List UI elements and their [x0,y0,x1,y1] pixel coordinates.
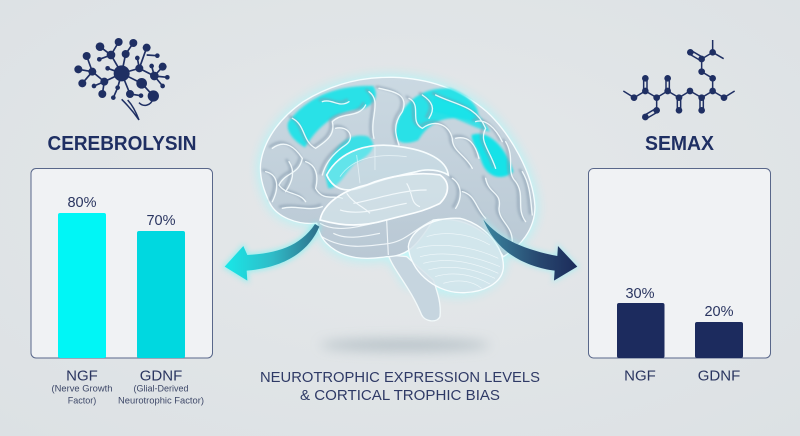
icon: peptide molecule [623,40,735,120]
axis label: Cerebrolysin GDNF [118,368,204,406]
bar: Cerebrolysin GDNF [137,231,185,358]
arrow: to Cerebrolysin [225,224,319,281]
arrow: to Semax [483,219,577,281]
axis label: Semax GDNF: GDNF [698,368,740,384]
temporal lobe [320,174,447,225]
axis label: Cerebrolysin NGF: (Nerve Growth [52,384,112,394]
panel: Cerebrolysin chart [31,168,212,358]
brain glow [260,77,535,293]
bar: Cerebrolysin NGF [58,213,106,358]
axis label: Semax NGF: NGF [624,368,656,384]
axis label: Cerebrolysin GDNF: Neurotrophic Factor) [118,396,204,406]
heading: Semax: SEMAX [645,133,715,155]
axis label: Cerebrolysin GDNF: GDNF [140,368,182,384]
cerebrum [260,77,535,258]
gyri highlights [266,88,532,242]
bar: Semax GDNF [695,322,743,358]
axis label: Cerebrolysin NGF: NGF [66,368,98,384]
illustration: translucent brain [260,77,535,321]
cyan active regions [288,86,513,188]
axis label: Cerebrolysin GDNF: (Glial-Derived [133,384,189,394]
value: 70%: 70% [146,213,176,229]
axis label: Cerebrolysin NGF: Factor) [68,396,96,406]
value: 80%: 80% [67,195,97,211]
caption: & CORTICAL TROPHIC BIAS [300,387,500,404]
panel: Semax chart [588,168,770,358]
bar: Semax NGF [617,303,664,358]
gyri shadows [263,87,530,240]
caption [260,369,540,404]
heading: Cerebrolysin: CEREBROLYSIN [48,133,196,155]
cerebellum [408,218,503,293]
value: 30%: 30% [625,286,655,302]
caption: NEUROTROPHIC EXPRESSION LEVELS [260,369,540,386]
brain shadow [320,339,490,351]
insula arc [327,145,448,190]
axis label: Cerebrolysin NGF [52,368,112,406]
brainstem [388,255,440,321]
value: 20%: 20% [704,304,734,320]
icon: neuron network [74,38,170,120]
